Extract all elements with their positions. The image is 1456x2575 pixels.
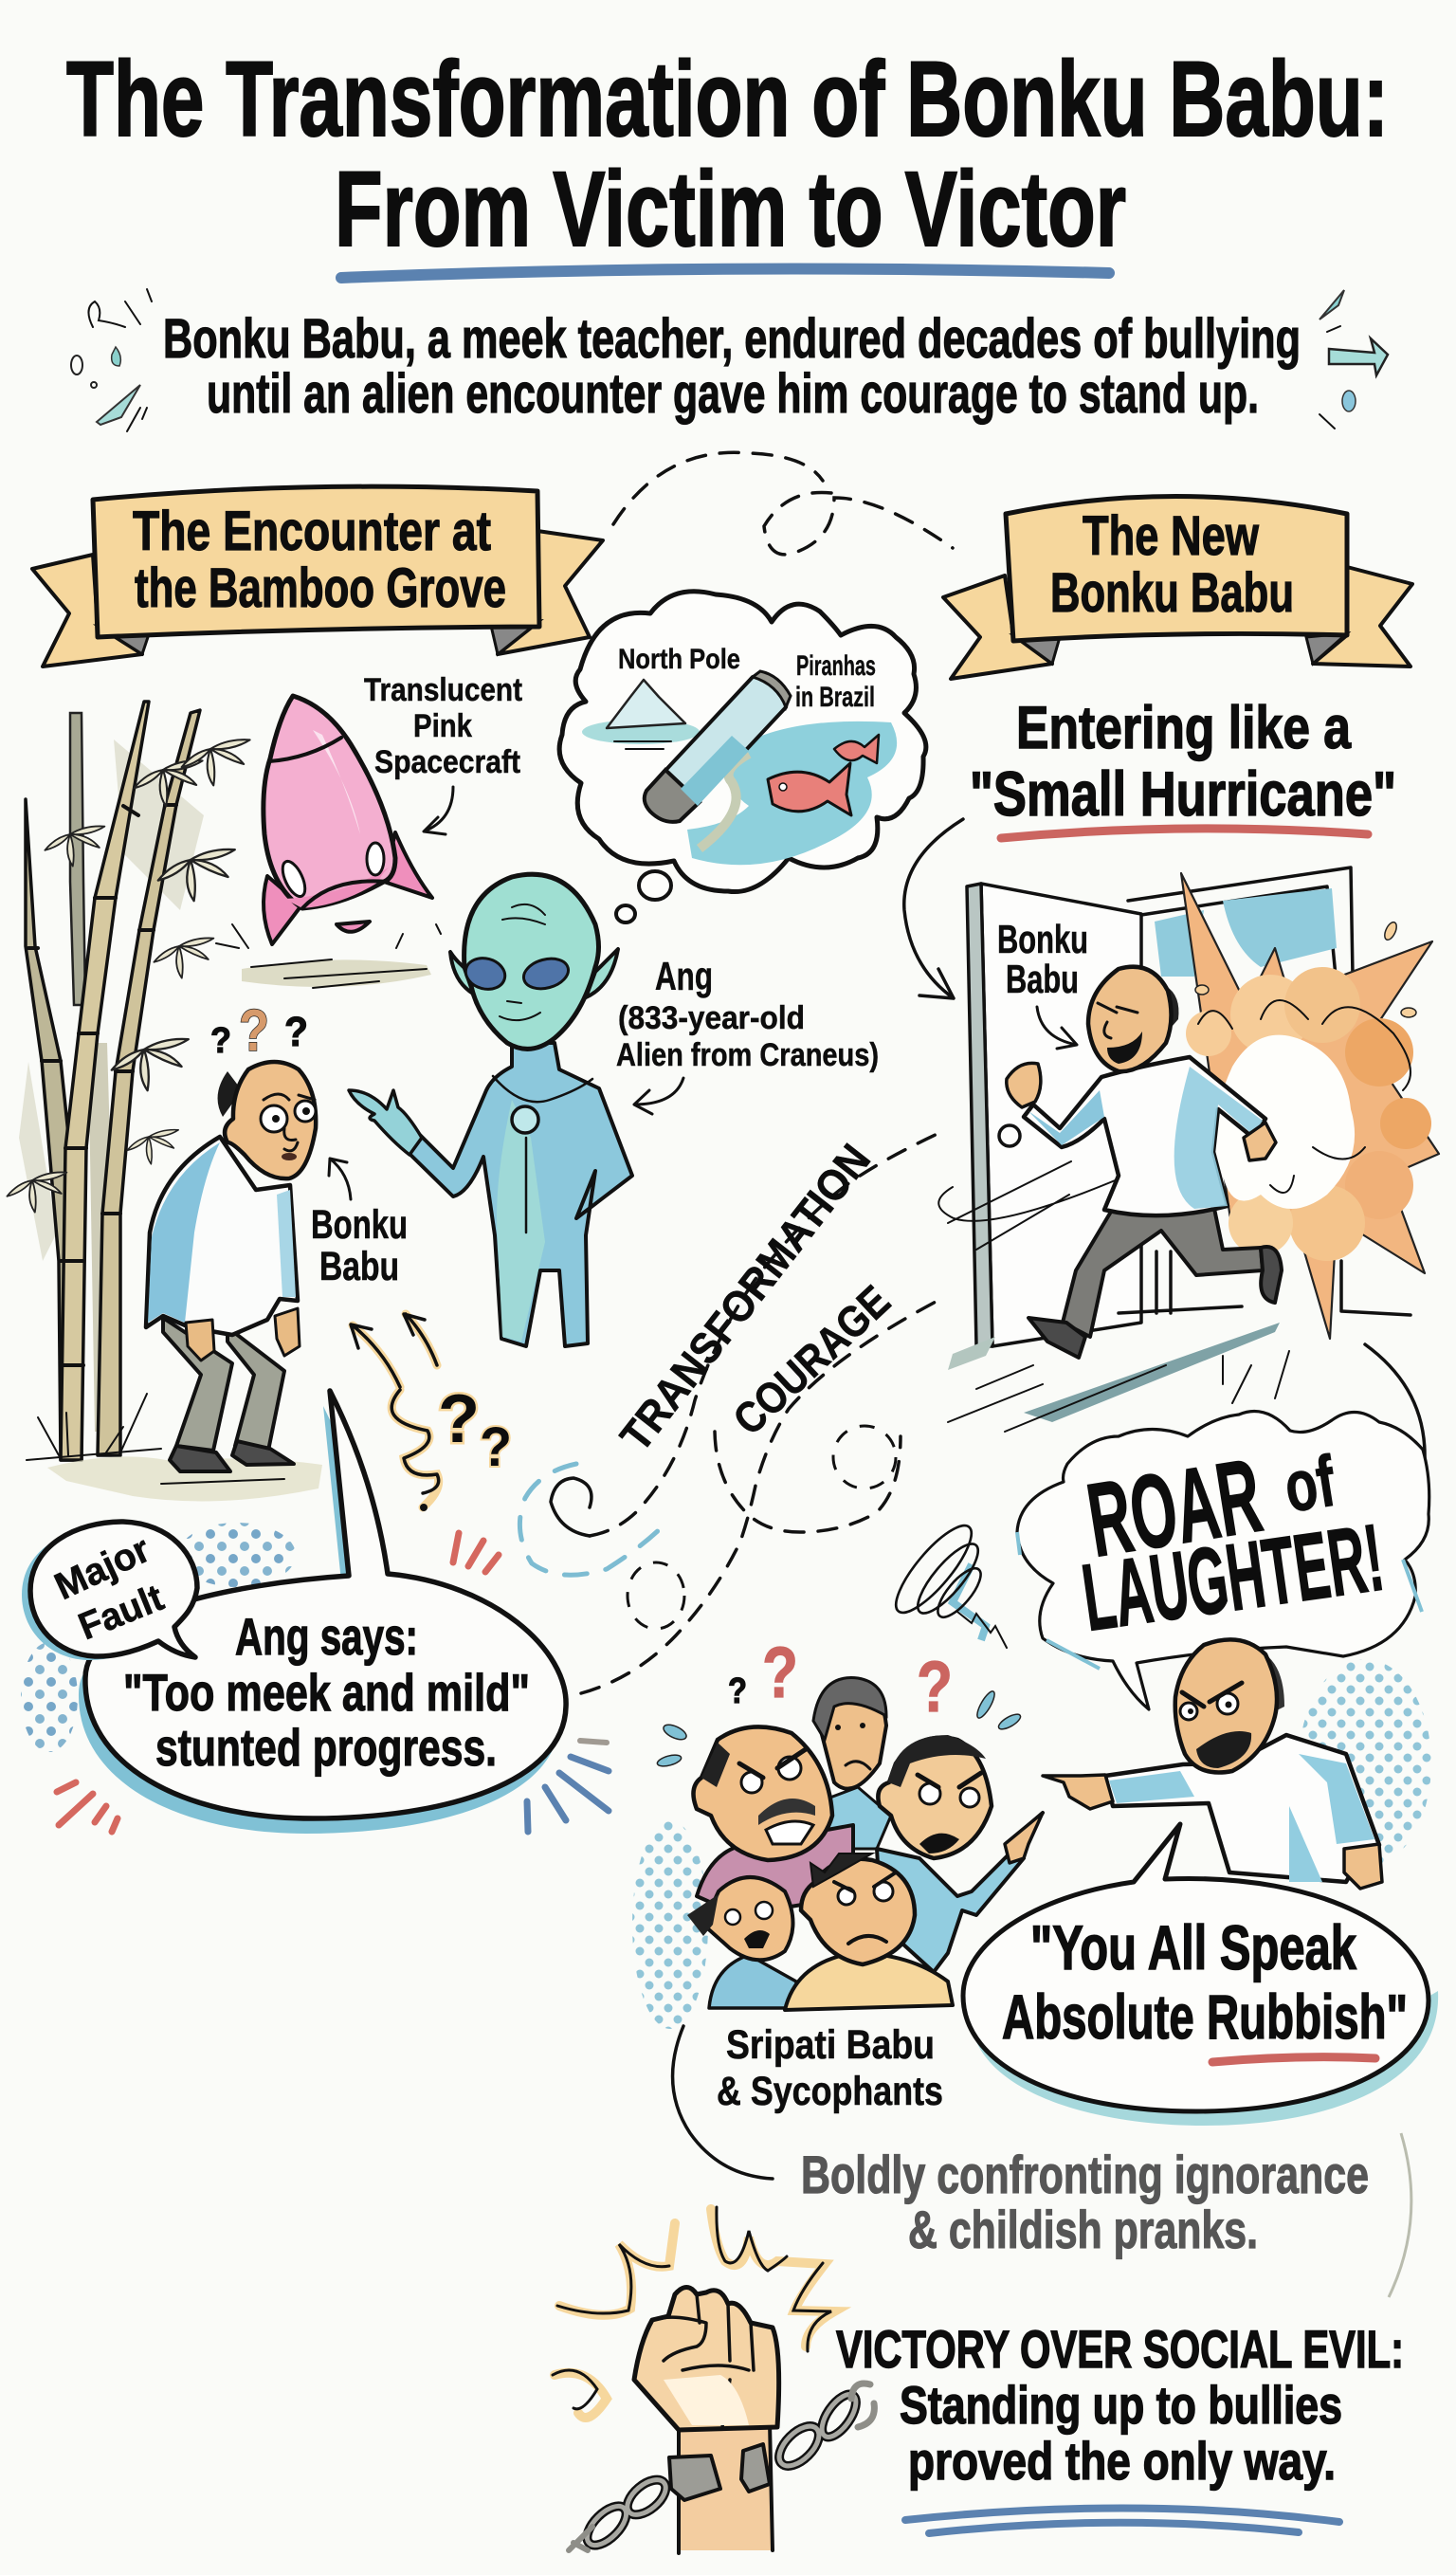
title underline xyxy=(341,269,1109,278)
forearm xyxy=(679,2422,773,2550)
label: ang: Ang xyxy=(655,954,713,998)
label: bonku babu right: Bonku xyxy=(997,917,1088,961)
icon: right doodles xyxy=(1320,290,1388,429)
forearm outline xyxy=(679,2422,773,2553)
dashed line: transformation xyxy=(590,1132,941,1536)
figure: small sycophant xyxy=(687,1877,796,2008)
connector arc to cloud xyxy=(1365,1344,1425,1507)
label: sripati babu and sycophants xyxy=(717,2022,943,2114)
illustration: raised fist breaking chains xyxy=(553,2207,874,2553)
banner: the encounter at the bamboo grove xyxy=(32,486,603,667)
heading: entering like a small hurricane xyxy=(970,695,1396,829)
dashed line: courage xyxy=(581,1301,937,1693)
double blue underline xyxy=(905,2508,1339,2533)
illustration: bamboo grove xyxy=(7,702,322,1501)
question marks over bonku: ? xyxy=(210,1021,231,1061)
yellow arrows and question squiggle: ? xyxy=(480,1416,512,1478)
label: translucent pink spacecraft xyxy=(364,672,522,780)
halftone dots left xyxy=(21,1523,296,1752)
label: bonku babu left xyxy=(311,1202,408,1289)
thought bubbles xyxy=(616,871,671,922)
connector curve xyxy=(673,2026,773,2179)
major fault bubble: Fault xyxy=(73,1577,170,1648)
yellow arrows and question squiggle xyxy=(351,1314,512,1511)
banner heading left xyxy=(133,501,506,619)
arrow to ang xyxy=(634,1078,683,1114)
text: boldly confronting ignorance: & childish pranks. xyxy=(908,2200,1258,2259)
banner heading left: The Encounter at xyxy=(133,501,491,562)
question marks over bonku xyxy=(210,998,308,1064)
broken chains xyxy=(569,2383,874,2552)
label: bonku babu left: Babu xyxy=(319,1244,399,1289)
banner heading right: The New xyxy=(1083,505,1260,567)
fist xyxy=(634,2287,779,2430)
bubble text: stunted progress. xyxy=(155,1718,497,1777)
figure: fat sycophant xyxy=(785,1854,953,2010)
banner heading right: Bonku Babu xyxy=(1050,562,1294,624)
heading: entering like a small hurricane: Entering like a xyxy=(1016,695,1352,761)
sweat drops xyxy=(656,1689,1023,1768)
label: bonku babu right: Babu xyxy=(1006,957,1079,1001)
illustration: meek bonku babu xyxy=(146,1062,316,1471)
bubble text: "Too meek and mild" xyxy=(123,1663,530,1722)
label: piranhas in brazil: Piranhas xyxy=(796,650,876,682)
figure: background sycophant xyxy=(813,1678,891,1849)
question marks over crowd: ? xyxy=(917,1647,953,1727)
curved label: courage: COURAGE xyxy=(723,1275,900,1444)
figure: mustached sripati babu xyxy=(693,1726,853,1915)
illustration: alien ang xyxy=(349,874,632,1346)
label: piranhas in brazil: in Brazil xyxy=(795,682,875,713)
arrow to running bonku xyxy=(1037,1007,1077,1049)
label: piranhas in brazil xyxy=(795,650,876,713)
label: sripati babu and sycophants: & Sycophants xyxy=(717,2069,943,2114)
label: north pole: North Pole xyxy=(618,644,740,675)
icon: lake xyxy=(687,721,897,865)
question marks over crowd: ? xyxy=(762,1633,798,1713)
label: ang xyxy=(616,954,879,1073)
dashed path at top xyxy=(613,452,953,555)
illustration: sripati babu and sycophants xyxy=(656,1633,1043,2010)
banner heading right xyxy=(1050,505,1294,624)
broken cuffs xyxy=(669,2444,770,2500)
illustration: angry bonku babu xyxy=(1043,1639,1382,1889)
major fault bubble xyxy=(22,1522,197,1660)
illustration: tornado scribble xyxy=(885,1516,1007,1648)
question marks over crowd: ? xyxy=(728,1671,747,1711)
dashed loop and circles xyxy=(628,1426,901,1629)
yellow arrows and question squiggle: ? xyxy=(438,1381,480,1457)
text: victory over social evil xyxy=(836,2319,1404,2491)
swirl xyxy=(519,1464,669,1575)
arrow to door xyxy=(904,819,963,998)
bubble text xyxy=(123,1607,530,1777)
major fault bubble: Major xyxy=(48,1528,156,1608)
text: victory over social evil: Standing up to bullies xyxy=(900,2375,1342,2435)
arrow to bonku babu xyxy=(329,1159,351,1199)
illustration: pink spacecraft xyxy=(216,696,441,988)
label: bonku babu right xyxy=(997,917,1088,1001)
red underline rubbish xyxy=(1212,2057,1375,2062)
label: translucent pink spacecraft: Translucent xyxy=(364,672,522,708)
bubble text: Ang says: xyxy=(235,1607,418,1666)
accent ticks around bubble xyxy=(57,1533,609,1832)
label: sripati babu and sycophants: Sripati Babu xyxy=(726,2022,935,2068)
banner: the new bonku babu xyxy=(943,497,1412,679)
illustration: explosion xyxy=(1181,873,1439,1339)
label: translucent pink spacecraft: Spacecraft xyxy=(374,744,520,780)
icon: iceberg xyxy=(582,680,700,749)
thought cloud xyxy=(559,592,926,922)
burst xyxy=(553,2207,834,2418)
text: boldly confronting ignorance xyxy=(801,2145,1369,2259)
label: ang: Alien from Craneus) xyxy=(616,1037,879,1073)
intro text xyxy=(163,308,1301,425)
banner heading left: the Bamboo Grove xyxy=(135,557,506,619)
label: ang: (833-year-old xyxy=(618,1000,805,1036)
icon: test tube xyxy=(645,671,791,822)
red underline xyxy=(1001,829,1368,838)
icon: piranhas xyxy=(768,735,879,815)
label: translucent pink spacecraft: Pink xyxy=(413,708,472,744)
roar text: of xyxy=(1279,1441,1341,1528)
bubble text xyxy=(1002,1912,1408,2052)
text: victory over social evil: proved the only way. xyxy=(908,2431,1336,2491)
roar text: ROAR xyxy=(1081,1437,1269,1580)
label: bonku babu left: Bonku xyxy=(311,1202,408,1248)
arrow to spacecraft xyxy=(424,787,453,834)
question marks over crowd xyxy=(728,1633,953,1727)
question marks over bonku: ? xyxy=(284,1009,308,1055)
halftone dots right xyxy=(632,1659,1431,2029)
title xyxy=(66,40,1389,268)
gray arc xyxy=(1389,2133,1411,2297)
roar of laughter cloud xyxy=(1017,1411,1429,1709)
icon: left doodles xyxy=(71,289,152,431)
curved label: transformation: TRANSFORMATION xyxy=(610,1135,880,1460)
illustration: bold bonku babu running xyxy=(1007,967,1282,1358)
question marks over bonku: ? xyxy=(239,998,269,1064)
illustration: door xyxy=(938,867,1410,1432)
title: From Victim to Victor xyxy=(335,150,1126,268)
speech bubble: you all speak absolute rubbish xyxy=(963,1824,1438,2126)
speech bubble: ang says xyxy=(22,1391,566,1834)
figure: pointing sycophant xyxy=(877,1735,1043,1972)
